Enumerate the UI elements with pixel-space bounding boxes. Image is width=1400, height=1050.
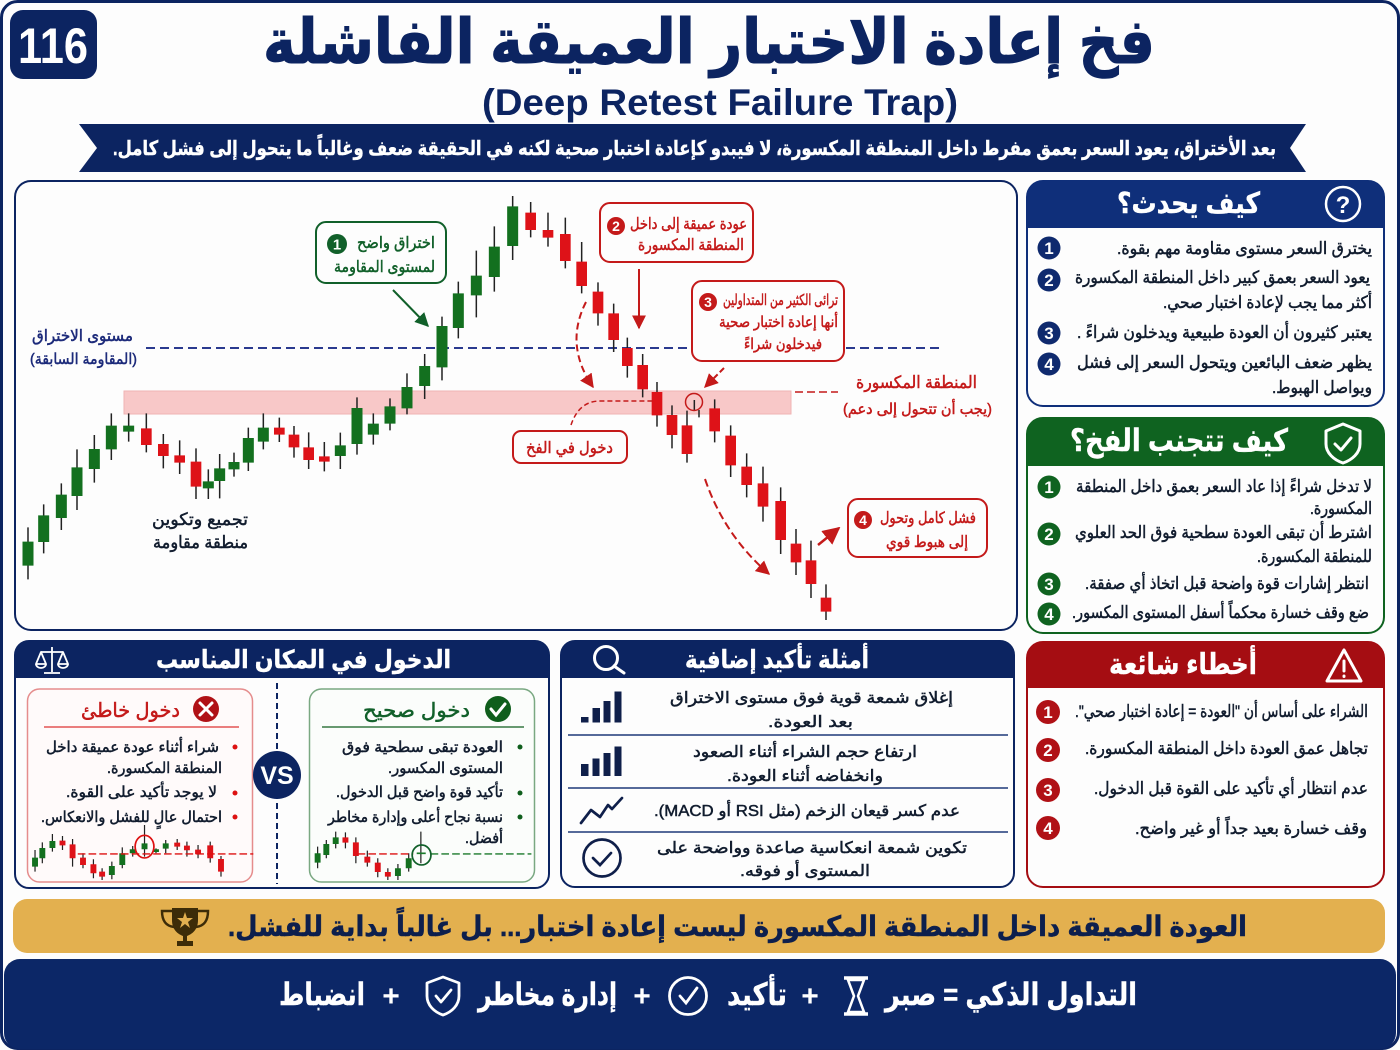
callout 3: traders see healthy retest: فيدخلون شراءً — [744, 336, 822, 353]
callout 2: deep return — [600, 203, 753, 262]
panel: how it happens — [1027, 181, 1384, 406]
arrow: dashed drop — [705, 479, 769, 574]
item 2: 2 — [1044, 271, 1054, 290]
divider — [276, 683, 278, 884]
box: correct entry: دخول صحيح — [363, 700, 470, 722]
item 4: 4 — [1044, 355, 1054, 374]
callout 2: deep return: 2 — [612, 218, 620, 234]
correct entry points: أفضل. — [465, 828, 503, 847]
item 1 — [1036, 700, 1368, 724]
item 4 — [1036, 815, 1367, 840]
banner: smart trading formula: + — [801, 980, 819, 1013]
callout 3: traders see healthy retest: أنها إعادة اختبار صحية — [719, 312, 838, 331]
banner: smart trading formula: انضباط — [279, 977, 365, 1012]
label: breakout level — [30, 328, 137, 368]
subtitle: (Deep Retest Failure Trap) — [482, 82, 958, 123]
item 3: انتظر إشارات قوة واضحة قبل اتخاذ أي صفقة. — [1085, 572, 1369, 594]
callout 3: traders see healthy retest: ترائى الكثير من المتداولين — [723, 292, 838, 309]
arrow: dashed pullback — [577, 302, 593, 387]
wrong entry points: شراء أثناء عودة عميقة داخل — [46, 737, 219, 756]
row 4 — [584, 840, 967, 881]
mini chart: wrong entry — [35, 825, 253, 880]
banner: smart trading formula: + — [633, 980, 651, 1013]
item 1: المكسورة. — [1310, 499, 1372, 518]
item 4: يظهر ضعف البائعين ويتحول السعر إلى فشل — [1077, 353, 1372, 373]
row 2 — [581, 741, 917, 786]
banner: smart trading formula: + — [382, 980, 400, 1013]
correct entry points — [327, 739, 522, 847]
panel: price chart — [15, 181, 1017, 630]
title: فخ إعادة الاختبار العميقة الفاشلة — [263, 8, 1155, 78]
item 3: يعتبر كثيرون أن العودة طبيعية ويدخلون شراءً . — [1077, 321, 1372, 342]
callout 1: clear breakout: اختراق واضح — [357, 235, 435, 253]
label: consolidation: منطقة مقاومة — [153, 533, 248, 552]
banner: smart trading formula: التداول الذكي = صبر — [883, 977, 1137, 1013]
arrow: downward — [638, 269, 640, 328]
icon: question: ? — [1336, 192, 1350, 219]
item 1 — [1038, 236, 1372, 260]
row 2: ارتفاع حجم الشراء أثناء الصعود — [693, 741, 917, 762]
label: consolidation — [152, 510, 248, 552]
item 1: 1 — [1044, 239, 1054, 258]
breakout level line — [146, 347, 943, 349]
correct entry points: تأكيد قوة واضح قبل الدخول. — [336, 781, 503, 801]
mini chart: correct entry — [318, 832, 531, 880]
banner: smart trading formula: تأكيد — [727, 974, 787, 1012]
callout 2: deep return: عودة عميقة إلى داخل — [630, 216, 747, 233]
panel: entering at the right place — [15, 641, 549, 888]
label: broken zone: المنطقة المكسورة — [856, 373, 977, 392]
item 4: 4 — [1043, 819, 1053, 838]
item 3: 3 — [1044, 324, 1054, 343]
label: consolidation: تجميع وتكوين — [152, 510, 248, 530]
box: wrong entry: دخول خاطئ — [81, 700, 180, 722]
item 4 — [1038, 352, 1372, 398]
item 2: أكثر مما يجب لإعادة اختبار صحي. — [1163, 291, 1372, 313]
item 4: وقف خسارة بعيد جداً أو غير واضح. — [1135, 815, 1367, 839]
row 1: بعد العودة. — [768, 714, 853, 732]
callout 3: traders see healthy retest: 3 — [704, 294, 712, 310]
label: breakout level: (المقاومة السابقة) — [30, 351, 137, 368]
icon: shield — [427, 977, 459, 1015]
wrong entry points: لا يوجد تأكيد على القوة. — [66, 781, 217, 801]
row 1: إغلاق شمعة قوية فوق مستوى الاختراق — [670, 690, 953, 708]
panel: common mistakes — [1027, 642, 1384, 887]
marker: false signal circle — [686, 394, 702, 410]
banner: smart trading formula: إدارة مخاطر — [476, 977, 617, 1013]
ribbon: summary — [79, 124, 1306, 172]
item 2: للمنطقة المكسورة. — [1257, 547, 1372, 566]
item 3: 3 — [1044, 575, 1054, 594]
wrong entry points: احتمال عالٍ للفشل والانعكاس. — [41, 809, 222, 829]
heading: كيف تتجنب الفخ؟ — [1070, 423, 1289, 459]
item 1: يخترق السعر مستوى مقاومة مهم بقوة. — [1117, 239, 1372, 259]
row 3: عدم كسر قيعان الزخم (مثل RSI أو MACD). — [654, 800, 960, 821]
item 2: 2 — [1044, 525, 1054, 544]
banner: gold takeaway: العودة العميقة داخل المنطقة المكسورة ليست إعادة اختبار... بل غالباً بداية للفشل. — [228, 906, 1247, 944]
item 2: يعود السعر بعمق كبير داخل المنطقة المكسورة — [1075, 268, 1370, 287]
badge: VS — [253, 751, 301, 799]
row 4: المستوى أو فوقه. — [740, 860, 870, 881]
callout 4: total failure: فشل كامل وتحول — [880, 510, 976, 528]
badge: number 116: 116 — [18, 18, 88, 74]
panel: how to avoid the trap — [1027, 418, 1384, 633]
row 4: تكوين شمعة انعكاسية صاعدة وواضحة على — [657, 840, 967, 858]
item 2: تجاهل عمق العودة داخل المنطقة المكسورة. — [1085, 739, 1368, 758]
heading: الدخول في المكان المناسب — [156, 646, 451, 675]
item 3 — [1038, 572, 1369, 596]
badge: VS: VS — [260, 762, 294, 790]
item 2: 2 — [1043, 741, 1053, 760]
row 2: وانخفاضه أثناء العودة. — [727, 765, 883, 786]
item 4: ويواصل الهبوط. — [1272, 378, 1372, 398]
callout 4: total failure: إلى هبوط قوي — [886, 534, 968, 552]
icon: question — [1326, 187, 1360, 221]
item 3: 3 — [1043, 781, 1053, 800]
callout 4: total failure: 4 — [859, 512, 867, 528]
item 1: 1 — [1043, 703, 1053, 722]
box: wrong entry — [28, 689, 253, 882]
icon: shield — [1326, 424, 1360, 463]
row 3 — [581, 798, 960, 823]
item 2: اشترط أن تبقى العودة سطحية فوق الحد العلوي — [1075, 521, 1372, 543]
callout: entering the trap — [513, 401, 653, 463]
item 1: 1 — [1044, 478, 1054, 497]
icon: x mark — [193, 696, 219, 722]
panel: extra confirmation examples — [561, 641, 1014, 887]
item 3: عدم انتظار أي تأكيد على القوة قبل الدخول. — [1094, 776, 1368, 799]
label: breakout level: مستوى الاختراق — [32, 328, 133, 346]
banner: smart trading formula — [4, 959, 1396, 1049]
candlesticks: deep pullback and fall — [531, 202, 826, 620]
correct entry points: العودة تبقى سطحية فوق — [342, 739, 503, 756]
item 1 — [1038, 476, 1372, 518]
callout 3: traders see healthy retest — [692, 281, 844, 361]
callout 1: clear breakout — [316, 222, 446, 283]
box: correct entry — [310, 689, 534, 882]
item 3 — [1038, 321, 1372, 344]
callout 2: deep return: المنطقة المكسورة — [638, 237, 744, 254]
icon: magnifier — [594, 646, 624, 673]
item 4: 4 — [1044, 605, 1054, 624]
banner: gold takeaway — [13, 899, 1385, 953]
item 3 — [1036, 776, 1368, 802]
arrow: to callout 4 — [818, 528, 839, 545]
heading: كيف يحدث؟ — [1117, 188, 1260, 220]
icon: check circle — [670, 978, 706, 1014]
icon: scales — [36, 647, 68, 673]
wrong entry points: المنطقة المكسورة. — [107, 760, 222, 777]
icon: check mark — [485, 696, 511, 722]
item 2 — [1038, 268, 1372, 313]
item 4 — [1038, 599, 1369, 626]
broken zone band — [124, 391, 791, 414]
arrow: to false signal — [705, 368, 724, 387]
arrow: breakout — [393, 290, 428, 326]
heading: أخطاء شائعة — [1109, 645, 1257, 681]
row 1 — [581, 690, 953, 732]
callout 4: total failure — [848, 499, 987, 557]
item 2 — [1038, 521, 1372, 566]
correct entry points: نسبة نجاح أعلى وإدارة مخاطر — [327, 807, 503, 826]
item 2 — [1036, 738, 1368, 762]
correct entry points: المستوى المكسور. — [388, 760, 503, 777]
icon: hourglass — [844, 978, 868, 1014]
wrong entry points — [41, 737, 238, 829]
candlesticks: rise and consolidation — [28, 196, 513, 579]
label: broken zone: (يجب أن تتحول إلى دعم) — [843, 399, 992, 418]
icon: trophy — [162, 908, 208, 946]
callout 1: clear breakout: 1 — [333, 236, 341, 254]
heading: أمثلة تأكيد إضافية — [685, 643, 869, 674]
icon: warning — [1327, 650, 1361, 681]
callout 1: clear breakout: لمستوى المقاومة — [334, 259, 435, 277]
item 1: لا تدخل شراءً إذا عاد السعر بعمق داخل المنطقة — [1076, 477, 1372, 496]
callout: entering the trap: دخول في الفخ — [526, 440, 613, 458]
label: broken zone — [795, 373, 992, 418]
